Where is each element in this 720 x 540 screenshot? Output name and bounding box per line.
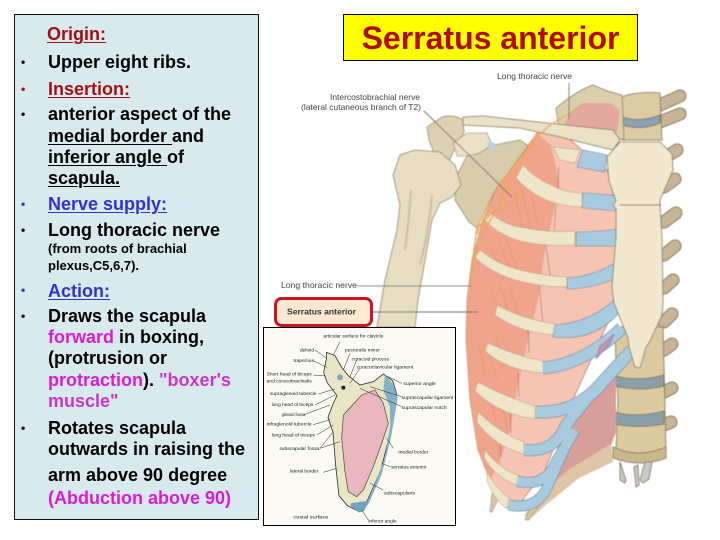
inset labels: costal surface [293,514,329,520]
text: insertion detail [21,104,231,188]
sternum [607,142,673,368]
inset labels: medial border [398,449,429,455]
inset labels: long head of triceps [272,433,315,439]
first rib and apex of the lung [556,85,624,139]
inset labels: pectoralis minor [345,348,380,354]
humerus [377,150,461,327]
text: insertion detail: inferior angle of [48,147,184,167]
inset labels: suprascapular ligament [402,395,454,401]
text: draws the scapula forward: Draws the scapula [48,306,206,326]
text: rotates scapula outwards: Rotates scapula [48,418,186,438]
heading: nerve supply: Nerve supply: [48,194,167,214]
scapula [455,140,528,228]
panel: origin, insertion, nerve supply and action text [14,14,259,520]
inset labels: coracoid process [352,357,389,363]
inset leader lines [303,342,402,520]
text: draws the scapula forward: • [21,309,25,323]
text: draws the scapula forward: forward in boxing, [48,327,204,347]
inset labels: subscapularis [384,490,416,496]
nerve labels [281,71,572,290]
heading: action: Action: [48,281,110,301]
text: long thoracic nerve: • [21,223,25,237]
text: rotates scapula outwards: • [21,421,25,435]
nerves [470,103,587,285]
text: insertion detail: anterior aspect of the [48,104,231,124]
text: insertion detail: scapula. [48,168,120,188]
text: rotates scapula outwards: outwards in raising the [48,439,245,459]
subscapular fossa [342,390,388,497]
text: draws the scapula forward [21,306,231,411]
inset labels: long head of biceps [272,402,314,408]
text: rotates scapula outwards [21,418,245,508]
text: insertion detail: • [21,107,25,121]
title [343,14,638,61]
inset labels: suprascapular notch [402,405,447,411]
text: draws the scapula forward: (protrusion or [48,348,167,368]
inset labels: subscapular fossa [279,446,320,452]
nerve labels: Long thoracic nerve [497,71,572,81]
text: long thoracic nerve: plexus,C5,6,7). [48,258,139,273]
serratus muscle mass on the rib cage [466,128,621,510]
inset labels: coracoclavicular ligament [357,364,414,370]
nerve labels: (lateral cutaneous branch of T2) [301,102,421,112]
text: upper eight ribs: Upper eight ribs. [48,52,191,72]
nerve labels: Intercostobrachial nerve [330,92,420,102]
callout: Serratus anterior label: Serratus anterior [287,306,357,316]
text: draws the scapula forward: muscle" [48,391,119,411]
heading: origin: Origin: [47,24,106,44]
inset labels: trapezius [293,358,315,364]
nerve labels: Long thoracic nerve [281,280,357,290]
ribs: bony parts [475,147,583,509]
heading: nerve supply: • [21,197,25,211]
text: long thoracic nerve [21,220,220,273]
text: insertion detail: medial border and [48,126,204,146]
inset labels: serratus anterior [391,464,427,470]
callout: Serratus anterior label [276,298,372,326]
title: Serratus anterior [362,20,619,56]
inset labels [267,334,454,525]
clavicle [463,116,620,150]
heading: insertion: Insertion: [48,79,130,99]
inset labels: Short head of biceps [267,372,312,378]
abdominal wall behind the costal margin [541,370,616,500]
heading: insertion: • [21,82,25,96]
heading: action: • [21,283,25,297]
text: rotates scapula outwards: (Abduction above 90) [48,488,231,508]
scapula outline [324,352,397,511]
heading: action [21,281,110,301]
vertebral column [613,92,680,487]
inset labels: glenoid fossa [282,412,305,418]
inset labels: lateral border [290,468,319,474]
text: long thoracic nerve: (from roots of brachial [48,241,187,256]
inset labels: supraglenoid tubercle [270,391,317,397]
inset labels: and coracobrachialis [267,379,312,385]
inset labels: deltoid [300,348,314,354]
inset labels: superior angle [403,381,436,387]
inset labels: articular surface for clavicle [323,334,384,340]
text: upper eight ribs: • [21,55,25,69]
text: long thoracic nerve: Long thoracic nerve [48,220,220,240]
muscle striations [479,185,538,465]
leader lines [357,83,569,312]
text: draws the scapula forward: protraction). "boxer's [48,370,231,390]
inset labels: infraglenoid tubercle [267,422,312,428]
text: rotates scapula outwards: arm above 90 degree [48,465,227,485]
inset labels: inferior angle [368,519,397,525]
inset: scapula costal surface diagram [264,328,456,526]
ribs: blue costal cartilages [553,150,621,338]
